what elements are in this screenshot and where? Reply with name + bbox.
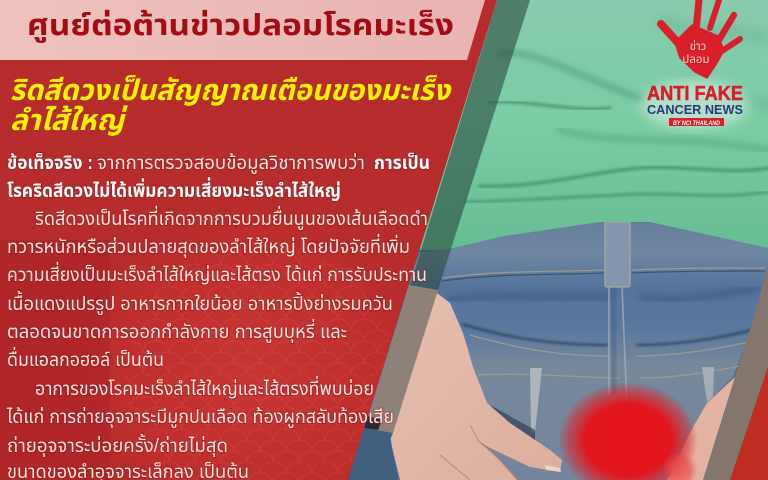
heading [10,75,451,137]
hand caption [682,39,710,66]
body text: เนื้อแดงแปรรูป อาหารกากใยน้อย อาหารปิ้งย่างรมควัน [7,290,393,316]
panel: top header band [0,0,485,60]
hand [390,293,562,480]
logo badge: by NCI Thailand: BY NCI THAILAND [673,121,721,127]
right hip skin [667,377,735,480]
shirt [420,0,768,250]
logo line: cancer news: CANCER NEWS [647,102,743,117]
photo: person in green shirt and jeans [340,0,768,480]
body text: ข้อเท็จจริง : [7,151,93,174]
body text: ดื่มแอลกอฮอล์ เป็นต้น [7,346,164,371]
red panel background with tumour image [110,0,497,480]
jeans [400,222,768,480]
body text [6,151,430,480]
body text: ความเสี่ยงเป็นมะเร็งลำไส้ใหญ่และไส้ตรง ได้แก่ การรับประทาน [7,261,427,286]
title: ศูนย์ต่อต้านข่าวปลอมโรคมะเร็ง [27,10,454,43]
red inflammation spot [558,382,698,480]
logo line: anti fake: ANTI FAKE [647,83,743,105]
logo: Anti Fake Cancer News [641,0,749,129]
red corner right [730,367,768,480]
translucent band right [703,265,768,480]
body text: การเป็น [374,152,430,174]
heading: ลำไส้ใหญ่ [10,105,128,137]
body text: โรคริดสีดวงไม่ได้เพิ่มความเสี่ยงมะเร็งลำไส้ใหญ่ [7,177,341,202]
translucent dark band left [348,0,530,480]
icon: red hand [661,0,740,78]
body text: ทวารหนักหรือส่วนปลายสุดของลำไส้ใหญ่ โดยปัจจัยที่เพิ่ม [7,233,410,258]
hand caption: ปลอม [682,54,710,66]
body text: จากการตรวจสอบข้อมูลวิชาการพบว่า [97,151,365,175]
body text: ตลอดจนขาดการออกกำลังกาย การสูบบุหรี่ และ [7,318,347,344]
body text: ได้แก่ การถ่ายอุจจาระมีมูกปนเลือด ท้องผูกสลับท้องเสีย [6,405,394,429]
body text: อาการของโรคมะเร็งลำไส้ใหญ่และไส้ตรงที่พบบ่อย [35,375,374,400]
body text: ริดสีดวงเป็นโรคที่เกิดจากการบวมยื่นนูนของเส้นเลือดดำ [35,205,428,231]
hand caption: ข่าว [690,39,706,53]
heading: ริดสีดวงเป็นสัญญาณเตือนของมะเร็ง [10,75,451,107]
body text: ถ่ายอุจจาระบ่อยครั้ง/ถ่ายไม่สุด [7,433,228,457]
belt loop [605,222,630,287]
